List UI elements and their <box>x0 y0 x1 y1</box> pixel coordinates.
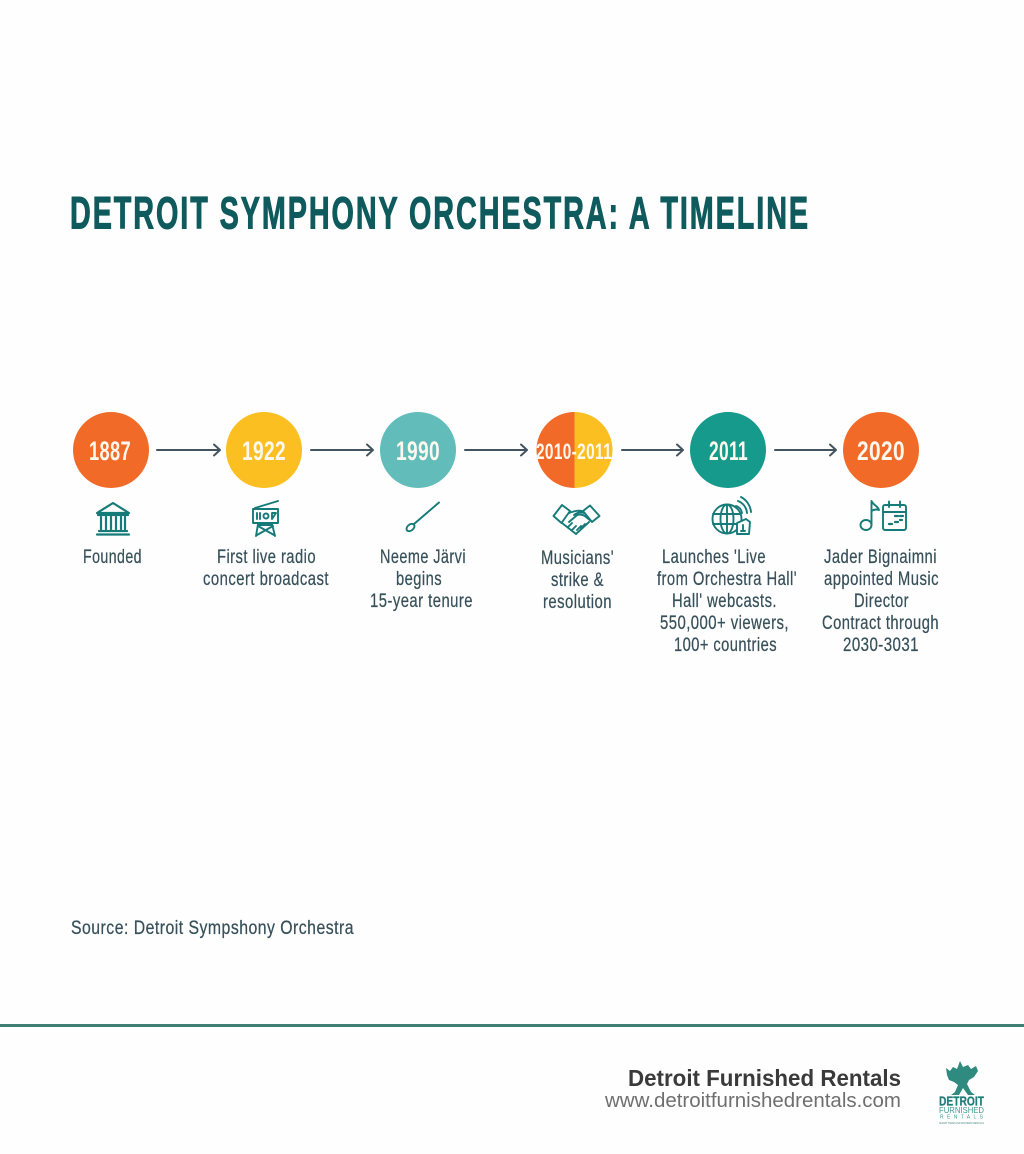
arrow 1 <box>157 444 220 456</box>
label: jader bignaimni: Director <box>854 590 909 612</box>
timeline <box>73 412 939 656</box>
year badge 1922 <box>226 412 302 488</box>
footer rule <box>0 1024 1024 1027</box>
label: live from orchestra hall: 550,000+ viewers, <box>660 612 789 634</box>
year badge 2020: 2020 <box>857 436 905 466</box>
label: musicians strike: strike & <box>551 569 604 591</box>
footer url: www.detroitfurnishedrentals.com <box>604 1090 901 1112</box>
year badge 2010-2011 <box>536 412 612 488</box>
label: live from orchestra hall <box>657 546 797 656</box>
logo figure <box>946 1061 978 1095</box>
label: musicians strike: Musicians' <box>541 547 614 569</box>
footer logo <box>939 1061 984 1125</box>
year badge 1887: 1887 <box>89 436 131 466</box>
label: founded: Founded <box>83 546 142 568</box>
milestone 1922 <box>203 412 329 590</box>
icon: handshake <box>554 505 600 534</box>
label: live from orchestra hall: from Orchestra Hall' <box>657 568 797 590</box>
label: neeme jarvi: begins <box>396 568 442 590</box>
logo wordmark rentals: RENTALS <box>940 1114 984 1120</box>
logo tagline: SHORT TERM AND MIDTERM RENTALS <box>939 1121 984 1125</box>
arrow 2 <box>311 444 373 456</box>
label: musicians strike: resolution <box>543 591 612 613</box>
year badge 2020 <box>843 412 919 488</box>
label: first live radio: First live radio <box>217 546 316 568</box>
arrow 5 <box>775 444 836 456</box>
label: musicians strike <box>541 547 614 613</box>
label: jader bignaimni <box>822 546 939 656</box>
year badge 1990: 1990 <box>396 436 440 466</box>
icon: conductor baton <box>405 502 439 533</box>
milestone 2010-2011 <box>536 412 614 613</box>
label: first live radio: concert broadcast <box>203 568 329 590</box>
milestone 2011 <box>657 412 797 656</box>
icon: globe with signal <box>712 497 751 534</box>
year badge 2010-2011: 2010-2011 <box>536 439 612 464</box>
milestone 2020 <box>822 412 939 656</box>
year badge 2011: 2011 <box>709 436 748 466</box>
footer brand name: Detroit Furnished Rentals <box>628 1065 901 1091</box>
label: neeme jarvi <box>370 546 473 612</box>
label: first live radio <box>203 546 329 590</box>
icon: museum building <box>97 503 129 534</box>
icon: radio tower <box>253 501 278 536</box>
year badge 2011 <box>690 412 766 488</box>
year badge 1922: 1922 <box>242 436 286 466</box>
source note: Source: Detroit Sympshony Orchestra <box>71 917 354 939</box>
label: live from orchestra hall: Launches 'Live <box>662 546 766 568</box>
icon: music note and calendar <box>860 501 906 530</box>
milestone 1887 <box>73 412 149 568</box>
year badge 1990 <box>380 412 456 488</box>
label: jader bignaimni: 2030-3031 <box>843 634 919 656</box>
year badge 1887 <box>73 412 149 488</box>
label: jader bignaimni: appointed Music <box>824 568 939 590</box>
milestone 1990 <box>370 412 473 612</box>
logo wordmark detroit: DETROIT <box>939 1094 984 1108</box>
label: live from orchestra hall: 100+ countries <box>674 634 777 656</box>
logo wordmark furnished: FURNISHED <box>939 1106 984 1115</box>
label: neeme jarvi: Neeme Järvi <box>380 546 466 568</box>
label: jader bignaimni: Jader Bignaimni <box>824 546 937 568</box>
label: jader bignaimni: Contract through <box>822 612 939 634</box>
arrow 3 <box>465 444 527 456</box>
label: live from orchestra hall: Hall' webcasts. <box>672 590 777 612</box>
arrow 4 <box>622 444 683 456</box>
label: neeme jarvi: 15-year tenure <box>370 590 473 612</box>
